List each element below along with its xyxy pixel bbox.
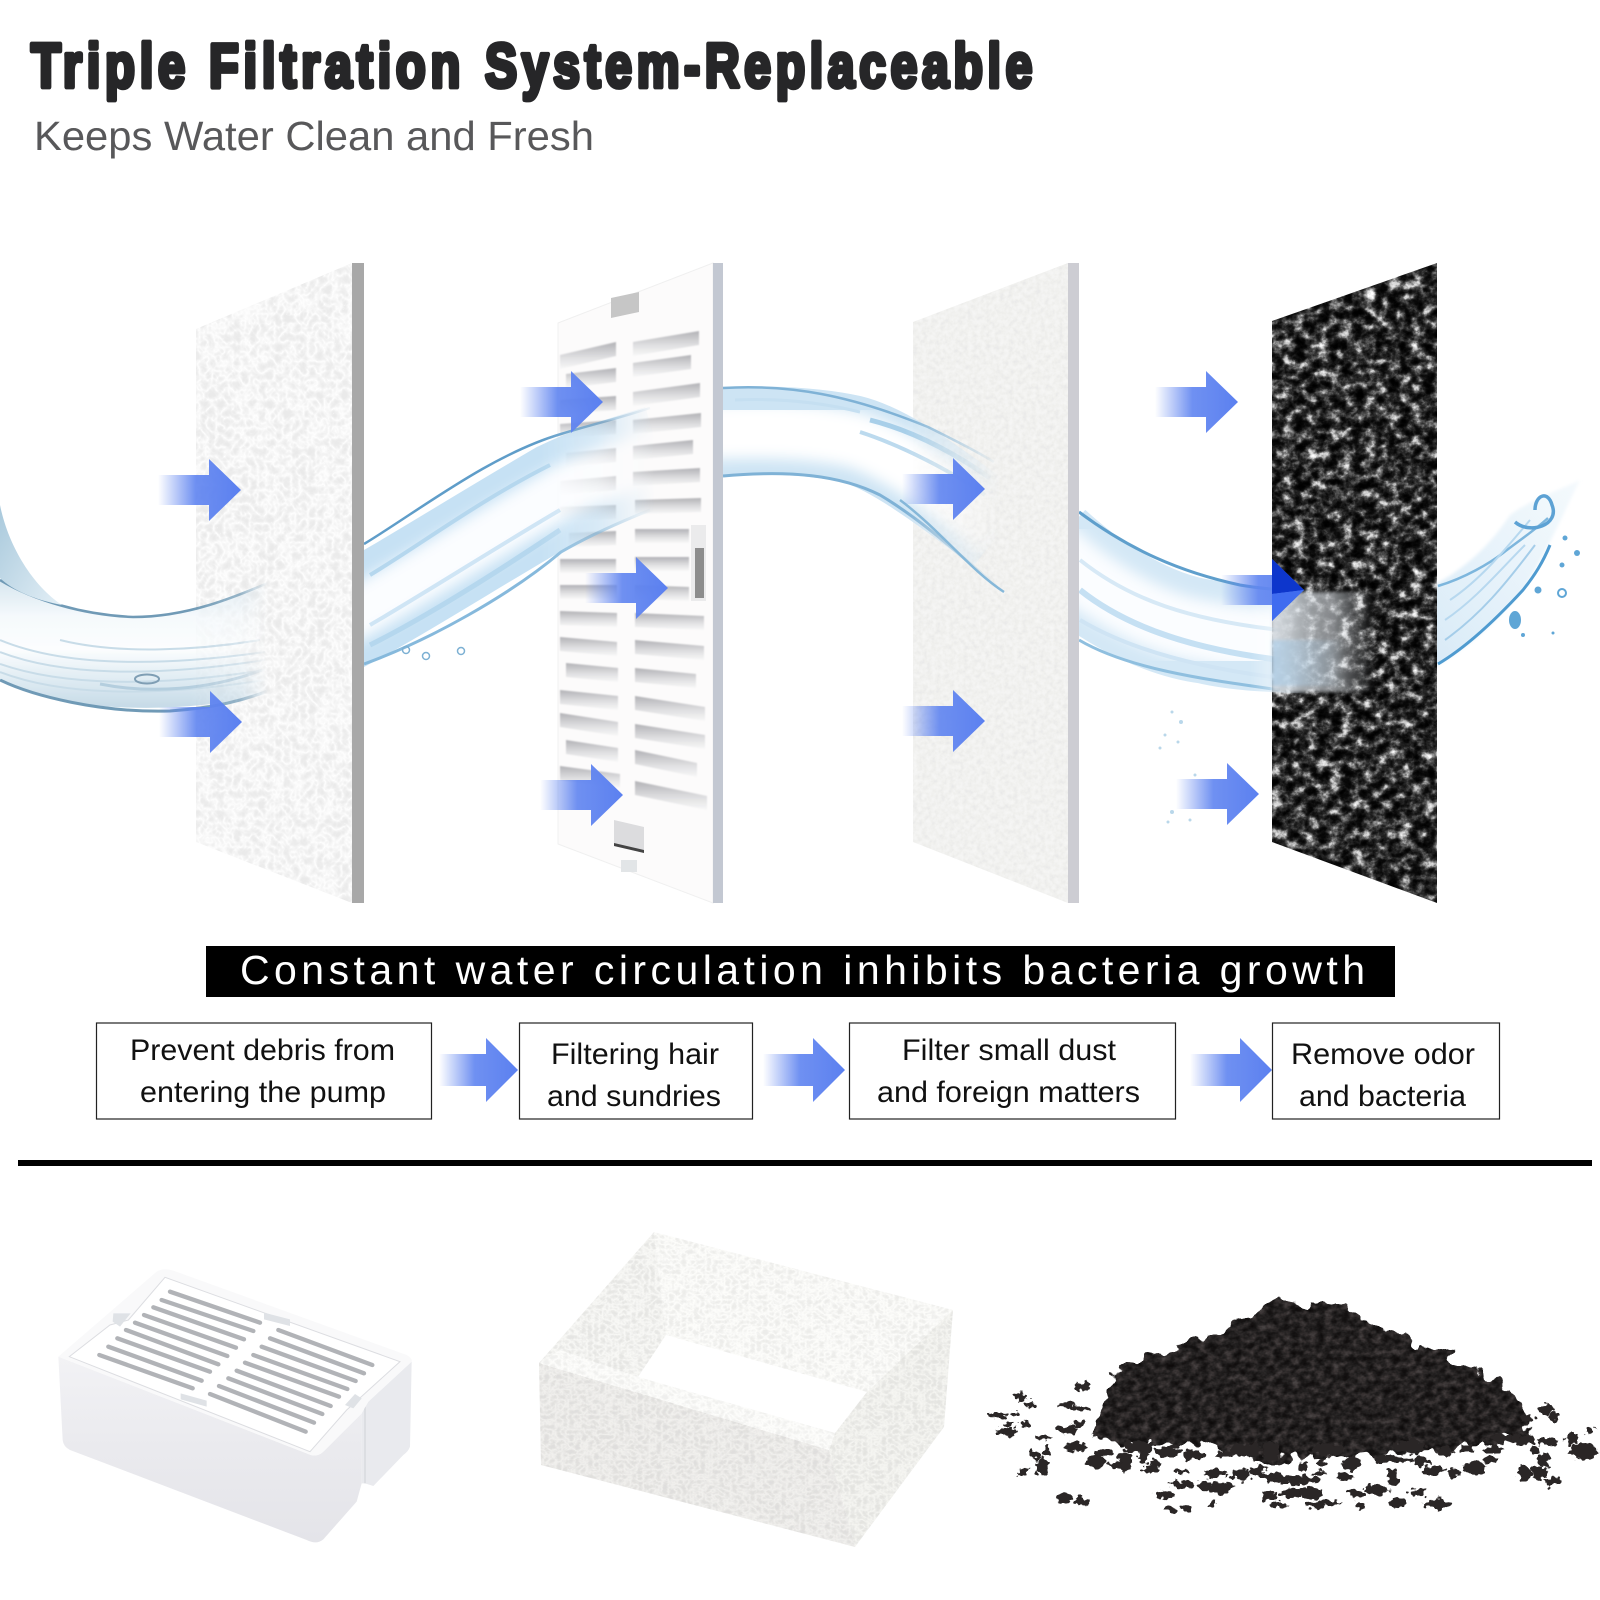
arrow 9 entering carbon xyxy=(1221,559,1304,621)
product: white filter cartridge xyxy=(58,1269,412,1542)
subtitle: Keeps Water Clean and Fresh xyxy=(34,113,594,159)
cartridge slots upper half xyxy=(99,1292,260,1388)
cartridge slots lower half xyxy=(210,1330,372,1432)
flow arrow 2 xyxy=(763,1038,845,1102)
divider line xyxy=(18,1160,1592,1166)
step 2 box: and sundries xyxy=(547,1080,721,1113)
foam inner front rim xyxy=(539,1350,835,1450)
step 1 box: Prevent debris from xyxy=(130,1034,395,1067)
step 2 box: Filtering hair xyxy=(551,1038,719,1071)
product: activated carbon pile xyxy=(989,1300,1599,1513)
cartridge front face xyxy=(58,1357,362,1542)
cartridge top rim xyxy=(58,1269,412,1455)
step 3 box xyxy=(850,1023,1176,1119)
water stream: inlet through panel 1 xyxy=(0,578,275,711)
title: System-Replaceable xyxy=(485,32,1037,101)
filter panel 2: white plastic grid xyxy=(558,263,723,903)
cartridge right block xyxy=(362,1362,412,1486)
step 4 box xyxy=(1272,1023,1500,1119)
arrow 5 on panel 2 xyxy=(540,764,623,826)
arrow 4 on panel 2 xyxy=(585,557,668,619)
cartridge grill plate xyxy=(69,1277,400,1452)
splash droplets xyxy=(1509,536,1580,637)
filter panel 1: coarse foam xyxy=(196,263,364,903)
arrow 2 on panel 1 xyxy=(159,691,242,753)
water stream: exit behind charcoal panel xyxy=(1425,480,1580,672)
top notch xyxy=(611,292,639,318)
step 4 box: and bacteria xyxy=(1299,1080,1466,1113)
water haze over carbon xyxy=(1272,592,1375,692)
flow arrow 3 xyxy=(1190,1038,1272,1102)
foam left rim xyxy=(539,1232,666,1377)
step 4 box: Remove odor xyxy=(1291,1038,1475,1071)
water stream: between panel 3 and carbon xyxy=(1079,510,1306,694)
carbon heap xyxy=(1095,1300,1531,1460)
step 3 box: Filter small dust xyxy=(902,1034,1117,1067)
scattered carbon chips xyxy=(989,1383,1599,1513)
water droplets xyxy=(402,646,464,660)
title: Triple xyxy=(31,32,190,101)
water stream: through panel 2 xyxy=(340,408,660,664)
arrow 1 on panel 1 xyxy=(158,459,241,521)
water spray specks xyxy=(1158,710,1196,824)
filter panel 4: activated carbon xyxy=(1272,263,1437,903)
side window xyxy=(691,525,706,601)
banner text: Constant water circulation inhibits bacteria growth xyxy=(240,947,1365,993)
foam right wall xyxy=(829,1310,953,1547)
arrow 10 toward carbon xyxy=(1176,763,1259,825)
cartridge clip tabs xyxy=(113,1313,362,1408)
water stream: over panel 3 xyxy=(723,386,994,582)
step 2 box xyxy=(520,1023,752,1119)
arrow 6 on panel 3 xyxy=(902,458,985,520)
grid slots xyxy=(560,331,707,810)
foam back wall xyxy=(654,1232,953,1392)
foam front face xyxy=(539,1363,855,1547)
upper water strand xyxy=(0,505,62,605)
arrow 7 on panel 3 xyxy=(902,690,985,752)
water strand fading on panel 3 xyxy=(900,500,1004,592)
banner xyxy=(206,946,1395,997)
filter panel 3: fine cotton xyxy=(913,263,1079,903)
title: Filtration xyxy=(209,32,465,101)
arrow 8 toward carbon xyxy=(1155,371,1238,433)
step 1 box: entering the pump xyxy=(140,1076,386,1109)
bottom notch xyxy=(614,820,644,853)
title xyxy=(31,32,1037,101)
step 3 box: and foreign matters xyxy=(877,1076,1140,1109)
flow arrow 1 xyxy=(439,1038,518,1102)
arrow 3 on panel 2 xyxy=(520,371,603,433)
step 1 box xyxy=(96,1023,432,1119)
product: foam frame xyxy=(539,1232,953,1547)
